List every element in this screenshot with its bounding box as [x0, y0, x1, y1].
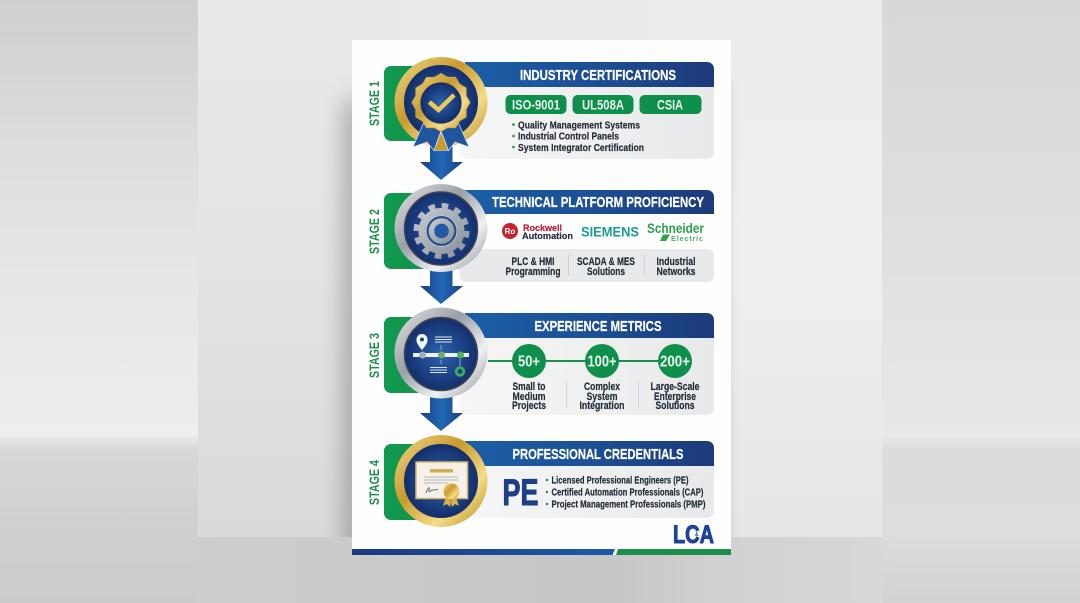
LCA logo: & [695, 532, 699, 538]
icon: silver timeline medal [394, 308, 488, 398]
logo: Schneider Electric: Schneider [647, 220, 704, 236]
stage 1 header bar [465, 62, 714, 87]
PE mark: PE [502, 472, 538, 513]
stage 2 header bar [465, 190, 714, 214]
stage 1 heading: INDUSTRY CERTIFICATIONS [520, 67, 676, 84]
certification list: System Integrator Certification [518, 142, 644, 154]
metric: 50+: 50+ [518, 354, 540, 370]
metric: 100+: 100+ [588, 354, 616, 370]
badge: ISO-9001 [506, 95, 566, 114]
stage 4 header bar [465, 441, 714, 466]
certification list: Industrial Control Panels [518, 130, 619, 142]
arrow: stage 3 to 4 [420, 393, 463, 431]
bottom footer stripe [352, 549, 731, 555]
stage 2 label: STAGE 2 [366, 209, 382, 254]
capability: industrial networks [656, 256, 696, 278]
capability: industrial networks: Industrial [656, 256, 696, 268]
badge: CSIA: CSIA [657, 96, 683, 112]
stage 2 panel [366, 190, 714, 282]
capability: SCADA and MES solutions: Solutions [587, 266, 625, 278]
stage 2 grey capability band [460, 249, 714, 282]
arrow: stage 1 to 2 [420, 146, 463, 180]
stage 4 green tab [384, 444, 464, 520]
stage 3 content panel [460, 330, 714, 415]
logo: Siemens: SIEMENS [581, 224, 639, 240]
stage 4 label: STAGE 4 [366, 460, 382, 505]
capability: industrial networks: Networks [656, 266, 696, 278]
metric: 50+: Medium [512, 391, 546, 403]
metric: 200+: 200+ [660, 354, 690, 370]
stage 1 content panel [460, 80, 714, 159]
badge: ISO-9001: ISO-9001 [512, 96, 560, 112]
metric: 50+: Small to [512, 381, 546, 393]
capability: PLC and HMI programming: PLC & HMI [512, 256, 554, 268]
stage 1 green tab [384, 66, 464, 141]
capability: PLC and HMI programming: Programming [506, 266, 560, 278]
stage 2 heading: TECHNICAL PLATFORM PROFICIENCY [492, 194, 704, 211]
credentials list [546, 476, 706, 510]
capability: PLC and HMI programming [506, 256, 560, 278]
logo: Rockwell Automation: Rockwell [523, 223, 562, 233]
arrow: stage 2 to 3 [420, 268, 463, 304]
stage 3 header bar [465, 313, 714, 338]
stage 1 panel [366, 62, 714, 159]
icon: gold certificate medal [394, 435, 488, 527]
stage 2 green tab [384, 193, 464, 269]
certification list: Quality Management Systems [518, 120, 640, 132]
credentials list: Certified Automation Professionals (CAP) [552, 488, 704, 498]
logo: Schneider Electric: Electric [671, 234, 703, 243]
metric: 200+: Solutions [656, 400, 694, 412]
stage 4 content panel [460, 455, 714, 518]
metric: 100+: Complex [584, 381, 621, 393]
logo: Schneider Electric [647, 220, 704, 243]
metric: 100+ [580, 344, 625, 412]
metric: 100+: Integration [580, 400, 625, 412]
credentials list: Project Management Professionals (PMP) [552, 500, 706, 510]
metric: 200+: Enterprise [654, 391, 696, 403]
stage 3 green tab [384, 317, 464, 393]
metric: 100+: System [586, 391, 618, 403]
metric: 50+ [512, 344, 546, 412]
stage 3 heading: EXPERIENCE METRICS [534, 318, 662, 335]
logo: Rockwell Automation: Automation [522, 231, 573, 241]
stage 3 label: STAGE 3 [366, 333, 382, 378]
LCA logo: LCA [673, 521, 714, 549]
capability: SCADA and MES solutions: SCADA & MES [577, 256, 635, 268]
logo: Rockwell Automation: Ro [505, 227, 515, 236]
metric: 200+ [650, 344, 700, 412]
metric: 200+: Large-Scale [650, 381, 700, 393]
badge: CSIA [640, 95, 702, 114]
stage 4 panel [366, 441, 714, 520]
capability: SCADA and MES solutions [577, 256, 635, 278]
credentials list: Licensed Professional Engineers (PE) [552, 476, 688, 486]
certification list [512, 120, 644, 154]
stage 1 label: STAGE 1 [366, 81, 382, 126]
icon: gold certification medal with ribbon [394, 57, 488, 150]
stage 4 heading: PROFESSIONAL CREDENTIALS [512, 446, 684, 463]
icon: silver gear medal [394, 184, 488, 272]
stage 3 panel [366, 313, 714, 415]
metric: 50+: Projects [512, 400, 546, 412]
logo: Rockwell Automation [502, 223, 573, 241]
badge: UL508A: UL508A [582, 96, 624, 112]
poster sheet [352, 40, 731, 555]
metrics connector line [488, 360, 678, 362]
